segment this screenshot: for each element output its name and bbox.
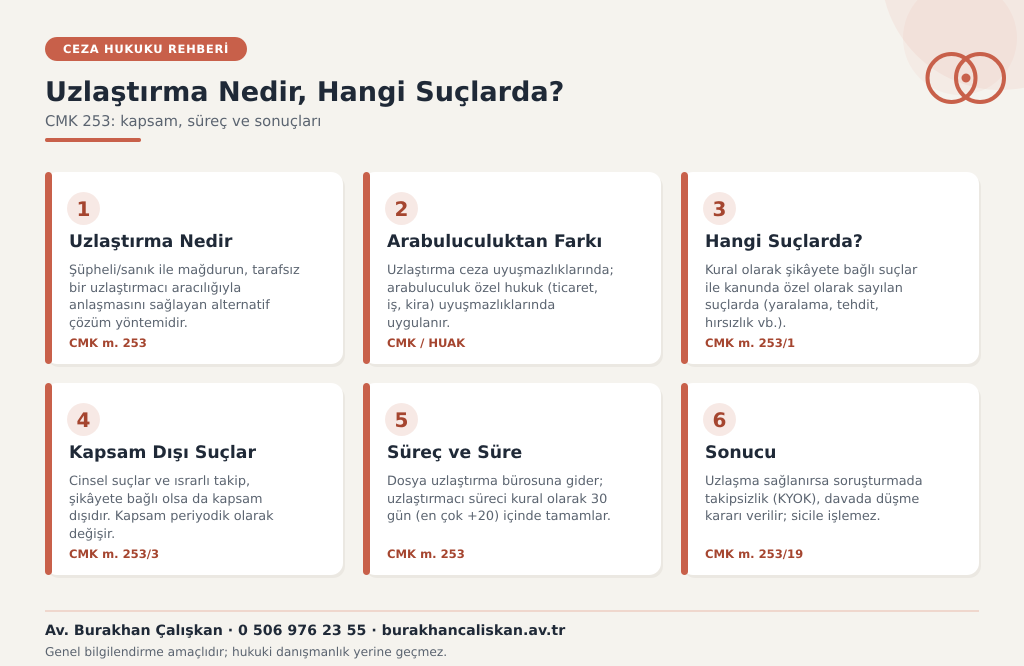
- body 5: gün (en çok +20) içinde tamamlar.: [387, 509, 611, 524]
- body 2: Uzlaştırma ceza uyuşmazlıklarında;: [387, 263, 614, 278]
- body 6: kararı verilir; sicile işlemez.: [705, 509, 881, 524]
- body 3: ile kanunda özel olarak sayılan: [705, 280, 903, 296]
- body 5: Dosya uzlaştırma bürosuna gider;: [387, 474, 603, 489]
- number 4: 4: [77, 408, 90, 432]
- panel: card 3: [681, 172, 979, 364]
- heading 2: Arabuluculuktan Farkı: [387, 232, 602, 252]
- body 4: Cinsel suçlar ve ısrarlı takip,: [69, 474, 250, 489]
- body 2: arabuluculuk özel hukuk (ticaret,: [387, 280, 598, 296]
- number 4: [67, 403, 100, 436]
- body 2: [387, 263, 614, 330]
- citation 2: CMK / HUAK: [387, 336, 465, 350]
- number 3: [703, 192, 736, 225]
- heading 4: Kapsam Dışı Suçlar: [69, 443, 256, 463]
- body 3: hırsızlık vb.).: [705, 316, 786, 330]
- body 5: uzlaştırmacı süreci kural olarak 30: [387, 492, 607, 506]
- body 1: çözüm yöntemidir.: [69, 316, 188, 330]
- body 6: takipsizlik (KYOK), davada düşme: [705, 492, 919, 506]
- body 6: Uzlaşma sağlanırsa soruşturmada: [705, 474, 923, 489]
- body 1: bir uzlaştırmacı aracılığıyla: [69, 280, 241, 296]
- number 6: [703, 403, 736, 436]
- panel: card 4: [45, 383, 343, 575]
- body 1: [69, 263, 300, 330]
- body 1: anlaşmasını sağlayan alternatif: [69, 298, 270, 313]
- heading 5: Süreç ve Süre: [387, 443, 522, 463]
- decorative background circles and icon: overlapping rings: [885, 0, 1024, 104]
- number 2: [385, 192, 418, 225]
- number 3: 3: [713, 197, 726, 221]
- body 2: iş, kira) uyuşmazlıklarında: [387, 298, 555, 313]
- body 2: uygulanır.: [387, 316, 450, 330]
- body 4: değişir.: [69, 526, 115, 542]
- citation 1: CMK m. 253: [69, 336, 147, 350]
- heading 6: Sonucu: [705, 443, 776, 463]
- body 6: [705, 474, 923, 524]
- number 5: 5: [395, 408, 408, 432]
- footer contact line: Av. Burakhan Çalışkan · 0 506 976 23 55 · burakhancaliskan.av.tr: [45, 623, 565, 639]
- body 5: [387, 474, 611, 524]
- citation 3: CMK m. 253/1: [705, 336, 795, 350]
- heading 3: Hangi Suçlarda?: [705, 232, 863, 252]
- panel: card 1: [45, 172, 343, 364]
- title underline: [45, 138, 141, 142]
- citation 5: CMK m. 253: [387, 547, 465, 561]
- body 4: [69, 474, 274, 542]
- number 6: 6: [713, 408, 726, 432]
- body 3: suçlarda (yaralama, tehdit,: [705, 298, 879, 313]
- number 1: 1: [77, 197, 90, 221]
- panel: card 2: [363, 172, 661, 364]
- number 5: [385, 403, 418, 436]
- body 3: [705, 263, 918, 330]
- badge: [45, 37, 247, 61]
- panel: card 6: [681, 383, 979, 575]
- heading 1: Uzlaştırma Nedir: [69, 232, 232, 252]
- number 1: [67, 192, 100, 225]
- title: Uzlaştırma Nedir, Hangi Suçlarda?: [45, 77, 564, 108]
- subtitle: CMK 253: kapsam, süreç ve sonuçları: [45, 113, 321, 130]
- body 4: şikâyete bağlı olsa da kapsam: [69, 492, 263, 506]
- badge: CEZA HUKUKU REHBERİ: [63, 42, 229, 56]
- number 2: 2: [395, 197, 408, 221]
- citation 6: CMK m. 253/19: [705, 547, 803, 561]
- citation 4: CMK m. 253/3: [69, 547, 159, 561]
- body 3: Kural olarak şikâyete bağlı suçlar: [705, 263, 917, 278]
- body 1: Şüpheli/sanık ile mağdurun, tarafsız: [69, 263, 300, 278]
- panel: card 5: [363, 383, 661, 575]
- body 4: dışıdır. Kapsam periyodik olarak: [69, 509, 274, 524]
- footer disclaimer: Genel bilgilendirme amaçlıdır; hukuki danışmanlık yerine geçmez.: [45, 645, 447, 659]
